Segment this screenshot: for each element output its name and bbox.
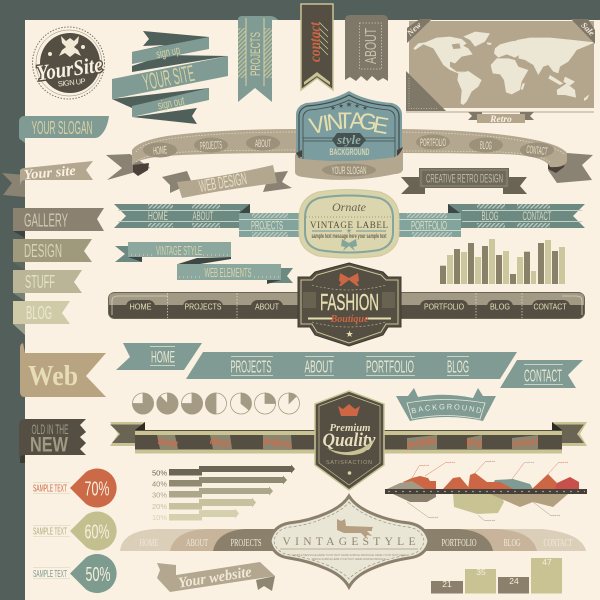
mini ribbon xyxy=(337,519,373,538)
side tab: web xyxy=(20,343,106,397)
nav pills xyxy=(143,134,554,158)
badge: background ribbon xyxy=(396,388,496,421)
side tab: blog xyxy=(13,301,70,335)
ribbon: web design: WEB DESIGN xyxy=(198,169,248,196)
drop: 60 percent: SAMPLE TEXT xyxy=(33,526,67,538)
ribbon: vintage style: VINTAGE STYLE xyxy=(156,243,202,258)
nav bar: fashion left and right: PORTFOLIO xyxy=(424,302,464,312)
striped nav left: home about xyxy=(114,204,301,237)
row 50 percent: 50% xyxy=(152,468,167,478)
bottom bar chart: 47 xyxy=(542,557,552,567)
vintage heading letters: I xyxy=(321,110,331,136)
badge: vintagestyle: SIMPLE SAMPLE HERE YOUR TEXT HERE SAMPLE MESSAGE xyxy=(312,557,386,561)
row 20 percent: 20% xyxy=(152,502,167,511)
badge: vintagestyle xyxy=(270,496,429,587)
striped nav right: portfolio blog contact: PORTFOLIO xyxy=(411,220,447,232)
row 10 percent xyxy=(152,508,239,522)
colored nav: main band xyxy=(186,352,517,379)
badge: vintage style: ★ xyxy=(362,104,368,112)
ribbon: retro: Retro xyxy=(489,115,512,125)
nav bar: fashion left and right: ABOUT xyxy=(255,302,279,312)
logo: Your Site seal: SIGN UP xyxy=(57,77,86,88)
row 50 percent xyxy=(152,464,295,478)
ribbon: web elements xyxy=(177,257,293,284)
badge: vintage style: BACKGROUND xyxy=(330,147,370,157)
colored nav: contact xyxy=(500,360,583,388)
colored nav: main band: BLOG xyxy=(447,356,469,376)
corner: sale xyxy=(571,19,597,44)
corner: sale: Sale xyxy=(579,20,597,38)
badge: vintage style: ★ xyxy=(345,100,353,109)
badge: vintagestyle: VINTAGESTYLE xyxy=(282,536,416,548)
nav ribbon: premium quality band xyxy=(110,422,587,454)
wide curved ribbon navigation: PROJECTS xyxy=(200,139,222,153)
icon: crown xyxy=(338,404,360,416)
row 30 percent: 30% xyxy=(152,490,167,500)
vintage heading letters: G xyxy=(358,108,378,135)
drop: 50 percent xyxy=(33,554,117,593)
drop: 60 percent xyxy=(33,512,117,550)
nav ribbon: premium quality band: projects xyxy=(262,434,293,451)
ribbon: your site small: Your site xyxy=(23,164,76,183)
badge: fashion boutique: FASHION xyxy=(320,289,379,315)
badge: premium quality: SATISFACTION xyxy=(326,460,372,466)
bar chart xyxy=(440,239,565,284)
vintage heading letters: T xyxy=(338,108,352,134)
ribbon: retro xyxy=(468,112,534,125)
side tab: web: Web xyxy=(28,361,78,392)
ribbon stack: sign up, your site, sign out: sign out xyxy=(156,93,186,112)
bookmark: contact: contact xyxy=(307,22,324,62)
row 40 percent xyxy=(152,476,287,488)
icon: teal bow xyxy=(341,239,357,251)
wide curved ribbon navigation: HOME xyxy=(153,144,168,158)
badge: vintage label: VINTAGE LABEL xyxy=(310,220,388,230)
bottom bar chart xyxy=(431,557,562,594)
ribbon: web elements: WEB ELEMENTS xyxy=(204,265,252,280)
badge: vintagestyle: SAMPLE MESSAGE HERE YOUR TEXT HERE SAMPLE MESSAGE HERE YOUR TEXT HERE xyxy=(292,553,406,557)
ribbon: old in the new xyxy=(19,419,86,463)
colored nav: main band: PORTFOLIO xyxy=(366,356,414,376)
ribbon: vintage style xyxy=(115,242,231,262)
corner: bottom left triangle xyxy=(406,71,446,111)
bottom nav tabs: BLOG xyxy=(504,537,521,549)
wide curved ribbon navigation: BLOG xyxy=(480,140,492,152)
area chart: sample text xyxy=(485,460,496,463)
colored nav: home: HOME xyxy=(151,348,175,366)
badge: fashion boutique: Boutique xyxy=(330,314,369,325)
badge: premium quality: Premium xyxy=(330,422,371,434)
area chart: sample text xyxy=(558,461,569,464)
nav ribbon: premium quality band: about xyxy=(209,435,231,450)
row 10 percent: 10% xyxy=(152,513,167,522)
ribbon: your slogan: YOUR SLOGAN xyxy=(32,118,92,138)
drop: 50 percent: SAMPLE TEXT xyxy=(33,569,67,580)
area chart: sample text xyxy=(550,514,561,517)
nav ribbon: premium quality band: home xyxy=(157,435,179,450)
nav bar: fashion left and right: PROJECTS xyxy=(184,302,222,312)
badge: vintage label: Ornate xyxy=(332,200,367,214)
vintage heading letters: A xyxy=(349,108,365,134)
bottom nav tabs xyxy=(120,529,586,551)
area chart: sample text xyxy=(485,519,496,522)
badge: vintage style: ★ xyxy=(338,102,344,110)
corner: new xyxy=(404,19,432,43)
wide curved ribbon navigation: ABOUT xyxy=(255,138,271,150)
ribbon: your site small xyxy=(2,161,93,197)
row 20 percent xyxy=(152,498,256,511)
badge: fashion boutique: ★ xyxy=(345,329,354,339)
badge: premium quality xyxy=(315,391,384,490)
bottom nav tabs: HOME xyxy=(140,537,159,549)
vintage heading letters xyxy=(307,108,391,139)
side tab: stuff: STUFF xyxy=(25,272,55,292)
striped nav right: portfolio blog contact: BLOG xyxy=(482,211,499,223)
ribbon: web design xyxy=(162,165,292,198)
ribbon: creative retro design: CREATIVE RETRO DESIGN xyxy=(426,172,503,186)
side tab: blog: BLOG xyxy=(26,303,52,323)
bookmark: projects: PROJECTS xyxy=(247,32,263,76)
badge: vintage style: ★ xyxy=(354,102,360,110)
badge: vintage style: YOUR SLOGAN xyxy=(332,165,367,177)
bookmark: about xyxy=(345,15,388,81)
nav ribbon: premium quality band: portfolio xyxy=(406,434,438,451)
ribbon: old in the new: OLD IN THE xyxy=(32,421,68,437)
striped nav right: portfolio blog contact: CONTACT xyxy=(522,211,552,223)
colored nav: home xyxy=(116,343,202,370)
center ribbon xyxy=(295,147,403,180)
right band xyxy=(400,129,567,167)
ribbon: your website: Your website xyxy=(177,564,253,592)
badge: vintage label: sample text message here your sample text xyxy=(312,234,386,240)
drop: 60 percent: 60% xyxy=(84,522,110,544)
bookmark: about: ABOUT xyxy=(363,28,380,64)
bottom nav tabs: PORTFOLIO xyxy=(442,537,477,549)
logo: Your Site seal xyxy=(32,27,104,99)
ribbon: your website xyxy=(157,562,275,592)
badge: premium quality: Quality xyxy=(322,430,376,451)
bookmark: projects xyxy=(238,16,278,102)
area chart: sample text xyxy=(428,516,439,519)
left band xyxy=(132,129,300,165)
bottom bar chart: 35 xyxy=(476,567,486,577)
nav bar: fashion left and right xyxy=(108,292,584,318)
ribbon: old in the new: NEW xyxy=(30,434,68,456)
world map continents xyxy=(413,32,595,105)
nav ribbon: premium quality band: blog xyxy=(466,436,482,449)
ribbon stack: sign up, your site, sign out xyxy=(112,31,228,124)
pie chart row xyxy=(132,393,300,414)
row 30 percent xyxy=(152,486,273,500)
striped nav right: portfolio blog contact xyxy=(399,204,585,237)
left tail xyxy=(106,154,150,180)
side tab: gallery: GALLERY xyxy=(24,210,68,230)
nav bar: fashion left and right: HOME xyxy=(130,302,152,312)
side tab: stuff xyxy=(13,270,82,301)
badge: fashion boutique xyxy=(298,263,401,346)
area chart: sample text xyxy=(445,461,456,464)
row 40 percent: 40% xyxy=(152,480,167,488)
percentage arrows chart xyxy=(152,464,295,522)
bottom nav tabs: ABOUT xyxy=(186,537,208,549)
bottom bar chart: 21 xyxy=(442,579,452,589)
nav bar: fashion left and right: CONTACT xyxy=(534,302,566,312)
ribbon stack: sign up, your site, sign out: sign up xyxy=(155,43,181,61)
right tail xyxy=(548,153,593,183)
side tab: design: DESIGN xyxy=(24,241,62,261)
area chart: sample text xyxy=(524,461,535,464)
ribbon: creative retro design xyxy=(401,168,527,194)
logo: Your Site seal: YourSite xyxy=(35,52,104,86)
badge: vintage label xyxy=(299,190,399,258)
nav ribbon: premium quality band: contact xyxy=(511,435,539,450)
side tab: design xyxy=(13,239,92,270)
drop: 70 percent: SAMPLE TEXT xyxy=(33,484,67,494)
drop: 50 percent: 50% xyxy=(86,564,111,586)
bookmark: contact xyxy=(301,4,333,90)
wide curved ribbon navigation xyxy=(106,129,593,183)
badge: background ribbon: BACKGROUND xyxy=(412,404,482,414)
bottom nav tabs: CONTACT xyxy=(544,537,573,549)
badge: vintage style xyxy=(295,91,403,180)
map panel: world map xyxy=(404,19,597,112)
striped nav left: home about: HOME xyxy=(148,211,168,223)
area chart: sample text xyxy=(419,464,430,467)
bottom nav tabs: PROJECTS xyxy=(230,537,262,549)
wide curved ribbon navigation: PORTFOLIO xyxy=(420,137,446,149)
striped nav left: home about: PROJECTS xyxy=(251,220,283,232)
wide curved ribbon navigation: CONTACT xyxy=(526,144,548,158)
icon: orange bow xyxy=(339,273,359,286)
colored nav: main band: PROJECTS xyxy=(230,356,272,376)
side tab: gallery xyxy=(13,208,104,238)
striped nav left: home about: ABOUT xyxy=(192,211,214,223)
badge: vintage style: ★ xyxy=(330,104,336,112)
drop: 70 percent xyxy=(33,468,117,508)
vintage heading letters: N xyxy=(325,108,345,135)
ribbon: your slogan xyxy=(19,116,109,143)
corner: new: New xyxy=(404,20,423,38)
nav bar: fashion left and right: BLOG xyxy=(490,302,510,312)
ribbon stack: sign up, your site, sign out: YOUR SITE xyxy=(141,60,197,95)
vintage heading letters: V xyxy=(307,111,328,139)
badge: vintage style: style xyxy=(336,132,361,147)
colored nav: main band: ABOUT xyxy=(304,356,334,376)
bottom bar chart: 24 xyxy=(509,576,519,586)
area chart xyxy=(385,460,587,522)
drop: 70 percent: 70% xyxy=(84,478,110,500)
badge: vintage label: ★ xyxy=(346,227,352,235)
vintage heading letters: E xyxy=(371,111,391,139)
